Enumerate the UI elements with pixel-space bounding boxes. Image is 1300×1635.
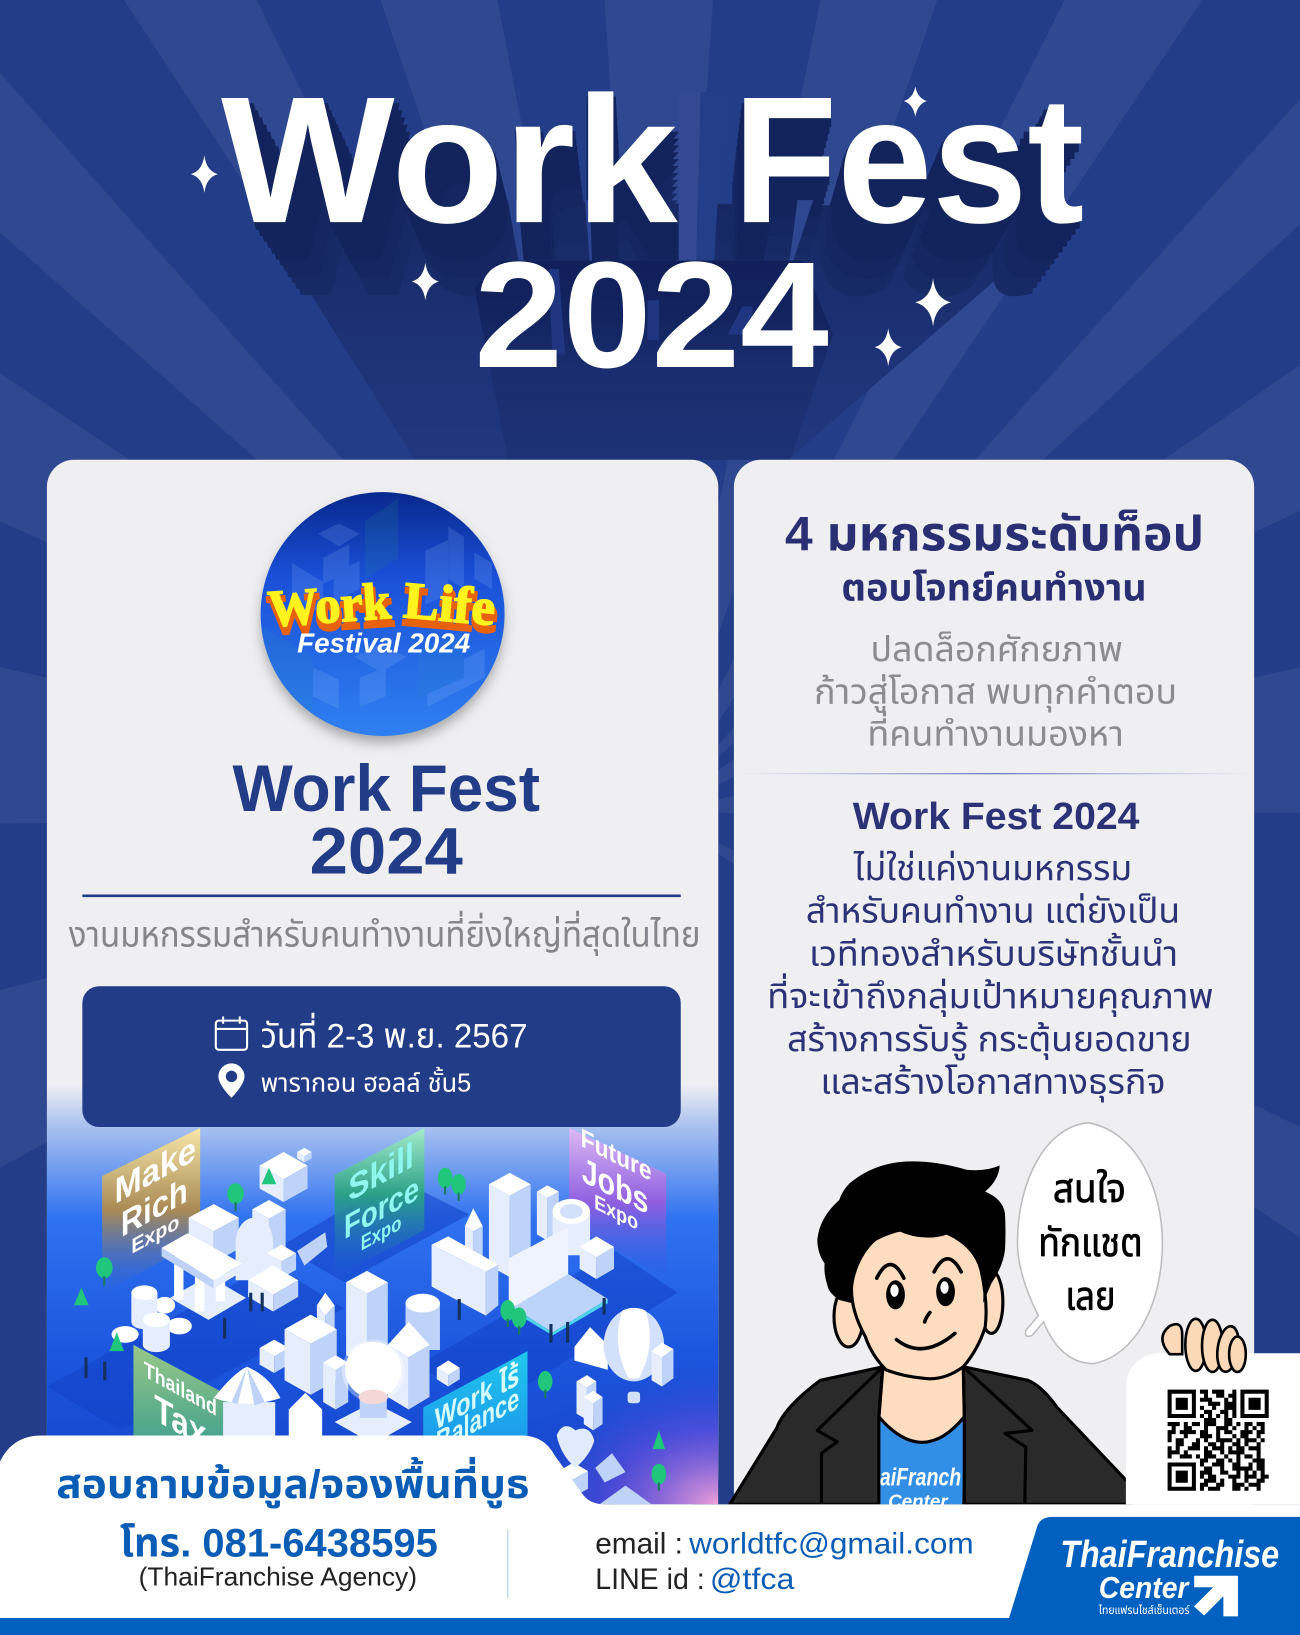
logo badge: Work Life Festival 2024 xyxy=(261,492,505,742)
speech bubble: สนใจ xyxy=(1053,1167,1126,1211)
title shadow: Work xyxy=(265,135,676,316)
logo: ThaiFranchise Center xyxy=(1008,1517,1300,1621)
email and LINE: email : xyxy=(595,1528,683,1560)
coin stacks xyxy=(112,1285,192,1352)
title shadow: Fest xyxy=(725,135,1041,316)
hand holding card xyxy=(1162,1319,1246,1373)
phone: โทร. 081-6438595 xyxy=(120,1521,438,1565)
title shadow: Fest xyxy=(728,105,1059,294)
expo sign: Future Jobs Expo xyxy=(569,1128,666,1262)
expo sign: Make Rich Expo: Expo xyxy=(131,1209,179,1259)
jacket xyxy=(730,1367,1131,1504)
logo badge: Work Life Festival 2024: Life xyxy=(401,572,498,637)
title shadow: Work xyxy=(238,89,678,283)
mascot character: Center xyxy=(888,1490,949,1511)
expo sign: Skill Force Expo: Expo xyxy=(361,1210,401,1256)
footer: contact band xyxy=(0,1436,1300,1635)
title: 2024 xyxy=(474,231,829,400)
title: Fest xyxy=(733,60,1084,261)
email and LINE: LINE id : xyxy=(595,1564,705,1596)
people xyxy=(84,1293,606,1380)
title shadow: Fest xyxy=(731,83,1071,278)
heading: Work Fest 2024: Work Fest xyxy=(232,752,540,825)
description: เวทีทองสำหรับบริษัทชั้นนำ xyxy=(809,932,1178,973)
expo sign: Work-Life Balance Expo: Work ไร้ xyxy=(435,1357,519,1437)
title shadow: Fest xyxy=(727,120,1050,305)
description: และสร้างโอกาสทางธุรกิจ xyxy=(820,1064,1166,1103)
expo sign: Future Jobs Expo: Expo xyxy=(594,1189,638,1235)
buildings: right block with suitcase and laptop xyxy=(432,1173,614,1335)
logo badge: Work Life Festival 2024: Life xyxy=(402,579,499,643)
eyes xyxy=(886,1280,905,1309)
title shadow: Work xyxy=(256,120,677,305)
title shadow: Work xyxy=(225,66,678,266)
speech bubble xyxy=(1017,1123,1162,1364)
logo badge: Work Life Festival 2024: Festival 2024 xyxy=(297,628,471,659)
email and LINE: @tfca xyxy=(710,1564,795,1596)
venue: พารากอน ฮอลล์ ชั้น5 xyxy=(261,1066,471,1098)
title shadow: Fest xyxy=(731,75,1076,272)
heart and small buildings xyxy=(557,1426,652,1504)
sparkles xyxy=(191,87,951,366)
subtitle: งานมหกรรมสำหรับคนทำงานที่ยิ่งใหญ่ที่สุดในไทย xyxy=(69,911,701,956)
brows, nose and smile xyxy=(877,1259,961,1349)
neck xyxy=(879,1360,964,1442)
logo: ThaiFranchise Center: Center xyxy=(1099,1572,1191,1605)
QR code xyxy=(1168,1390,1269,1491)
title shadow: Work xyxy=(260,126,676,310)
expo sign: Future Jobs Expo: Future xyxy=(581,1122,652,1187)
ears xyxy=(980,1271,1003,1333)
description xyxy=(767,795,1213,1103)
description: ที่จะเข้าถึงกลุ่มเป้าหมายคุณภาพ xyxy=(767,973,1213,1017)
expo sign: Skill Force Expo xyxy=(334,1128,424,1258)
hair xyxy=(817,1161,1005,1303)
expo sign: Work-Life Balance Expo: Balance xyxy=(436,1380,519,1460)
mascot character: aiFranch xyxy=(880,1464,961,1492)
expo sign: Thailand Tax Expo: Tax xyxy=(154,1386,207,1457)
date: วันที่ 2-3 พ.ย. 2567 xyxy=(261,1013,528,1056)
icon: arrow xyxy=(1195,1576,1237,1616)
trees xyxy=(74,1168,666,1491)
heading: 4 top expos xyxy=(785,508,1204,609)
panel: right details card xyxy=(730,460,1300,1511)
buildings: upper left block xyxy=(189,1148,327,1311)
title shadow: Work xyxy=(269,143,676,322)
icon: location pin xyxy=(218,1063,244,1098)
title shadow: Work xyxy=(252,111,677,299)
expo sign: Make Rich Expo: Rich xyxy=(121,1170,188,1246)
title shadow: Fest xyxy=(732,66,1080,266)
shirt xyxy=(879,1407,964,1504)
email and LINE: worldtfc@gmail.com xyxy=(688,1528,974,1560)
title shadow: Work xyxy=(230,75,678,272)
title shadow: Work xyxy=(247,105,677,294)
phone: (ThaiFranchise Agency) xyxy=(139,1562,417,1592)
QR card xyxy=(1126,1319,1300,1504)
description: ไม่ใช่แค่งานมหกรรม xyxy=(853,850,1132,888)
speech bubble: ทักแชต xyxy=(1038,1221,1143,1265)
title shadow: Fest xyxy=(730,89,1067,283)
title shadow: Fest xyxy=(725,143,1037,322)
roads xyxy=(48,1192,678,1418)
title xyxy=(221,60,1084,400)
heading: Work Fest 2024 xyxy=(232,752,540,888)
expo sign: Thailand Tax Expo: Thailand xyxy=(144,1357,217,1421)
heading: 4 top expos: ตอบโจทย์คนทำงาน xyxy=(841,567,1147,609)
expo sign: Make Rich Expo: Make xyxy=(115,1129,196,1212)
logo badge: Work Life Festival 2024: Work xyxy=(267,579,394,645)
buildings: central towers with light bulb xyxy=(260,1271,460,1444)
carousel xyxy=(214,1366,322,1436)
info box: date and venue xyxy=(82,986,681,1127)
email and LINE xyxy=(595,1528,974,1596)
title: Work xyxy=(221,60,678,261)
tagline: ก้าวสู่โอกาส พบทุกคำตอบ xyxy=(814,674,1177,713)
expo sign: Skill Force Expo: Force xyxy=(344,1168,419,1247)
title shadow: Work xyxy=(243,98,677,289)
title shadow: Fest xyxy=(726,126,1046,310)
logo badge: Work Life Festival 2024: Work xyxy=(266,573,393,639)
description: Work Fest 2024 xyxy=(853,795,1140,837)
title shadow xyxy=(225,66,1080,460)
tagline: ปลดล็อกศักยภาพ xyxy=(870,631,1123,669)
tagline: ที่คนทำงานมองหา xyxy=(867,710,1124,753)
expo sign: Make Rich Expo xyxy=(102,1128,200,1293)
phone xyxy=(120,1521,438,1592)
heading: Work Fest 2024: 2024 xyxy=(310,815,463,888)
expo sign: Skill Force Expo: Skill xyxy=(348,1135,414,1210)
title shadow: Work xyxy=(234,83,678,278)
description: สำหรับคนทำงาน แต่ยังเป็น xyxy=(806,893,1180,931)
tagline xyxy=(814,631,1177,753)
mascot character xyxy=(730,1161,1131,1511)
heading: 4 top expos: 4 มหกรรมระดับท็อป xyxy=(785,508,1204,561)
title shadow: Fest xyxy=(728,111,1054,299)
speech bubble: เลย xyxy=(1065,1274,1115,1318)
title shadow: Fest xyxy=(729,98,1063,289)
description: สร้างการรับรู้ กระตุ้นยอดขาย xyxy=(787,1021,1192,1060)
contact heading: สอบถามข้อมูล/จองพื้นที่บูธ xyxy=(56,1456,530,1508)
building: bank with columns xyxy=(162,1233,246,1320)
icon: calendar xyxy=(216,1016,247,1050)
expo sign: Future Jobs Expo: Jobs xyxy=(582,1149,648,1222)
face xyxy=(851,1228,986,1379)
illustration: isometric expo city xyxy=(47,1084,718,1504)
logo: ThaiFranchise Center: ไทยแฟรนไชส์เซ็นเตอร์ xyxy=(1098,1603,1190,1617)
title shadow: Fest xyxy=(724,149,1033,327)
title shadow: Work xyxy=(273,149,676,327)
hot-air balloon and tent xyxy=(574,1308,673,1430)
panel: left event card xyxy=(47,460,718,1504)
